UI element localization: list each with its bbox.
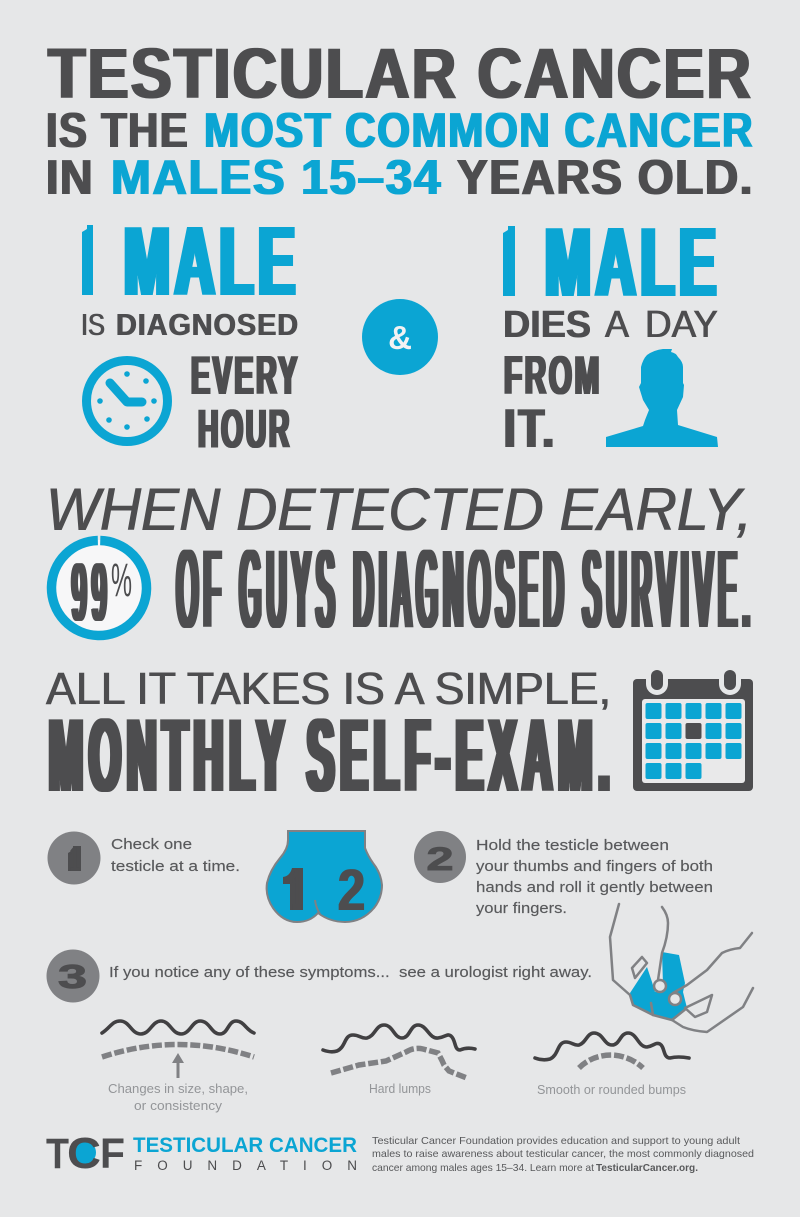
- symptom: smooth bumps: Smooth or rounded bumps: [537, 1083, 686, 1097]
- symptom: changes in size: or consistency: [134, 1099, 223, 1113]
- symptom: changes in size: Changes in size, shape,: [108, 1082, 248, 1096]
- text: hold the testicle: hands and roll it gently between: [476, 879, 713, 896]
- logo: TCF: C: [67, 1129, 101, 1178]
- logo text: foundation name: TESTICULAR CANCER: [133, 1134, 357, 1157]
- text: foundation description: TesticularCancer.org.: [596, 1162, 698, 1174]
- icon: hands examining: [610, 904, 753, 1032]
- logo: TCF: F: [100, 1130, 125, 1178]
- heading: 1 male: MALE: [124, 206, 300, 316]
- logo text: foundation name: [133, 1134, 357, 1173]
- text: foundation description: Testicular Cancer Foundation provides education and support to young adult: [372, 1135, 740, 1147]
- title: IN: [46, 151, 94, 205]
- text: every hour: EVERY: [191, 344, 300, 406]
- symptom: hard lumps: Hard lumps: [369, 1082, 431, 1096]
- icon: scrotum diagram: 2: [338, 858, 365, 923]
- heading: 1 male: [503, 207, 721, 317]
- panel: dies a day: [503, 207, 721, 459]
- text: hold the testicle: your thumbs and fingers of both: [476, 858, 713, 875]
- symptom: smooth bumps: [535, 1033, 689, 1097]
- text: foundation description: cancer among males ages 15–34. Learn more at: [372, 1162, 594, 1174]
- text: hold the testicle: Hold the testicle between: [476, 837, 669, 854]
- text: hold the testicle: [476, 837, 713, 917]
- panel: diagnosed every hour: [81, 206, 300, 460]
- text: dies a day: A: [605, 304, 630, 346]
- text: dies a day: DIES: [503, 304, 591, 346]
- icon: number 2 badge: 2: [426, 841, 454, 877]
- icon: ampersand circle: &: [388, 319, 412, 356]
- text: check one testicle: [111, 836, 240, 875]
- text: symptoms instruction: If you notice any of these symptoms... see a urologist right away.: [109, 964, 592, 981]
- text: hold the testicle: your fingers.: [476, 900, 567, 917]
- chart: 99 percent ring: [50, 539, 148, 638]
- chart: 99 percent ring: 99: [72, 547, 112, 638]
- text: from it: FROM: [504, 344, 602, 406]
- icon: person silhouette: [606, 349, 718, 447]
- text: is diagnosed: IS: [81, 307, 105, 342]
- text: all it takes is a simple: ALL IT TAKES IS A SIMPLE,: [46, 663, 611, 714]
- icon: clock: [86, 360, 168, 442]
- logo: TCF: [46, 1129, 125, 1178]
- logo text: foundation name: FOUNDATION: [134, 1158, 357, 1173]
- arrow: [172, 1053, 184, 1078]
- icon: number 2 badge: [414, 831, 466, 883]
- symptom: hard lumps: [323, 1025, 475, 1096]
- text: every hour: [191, 344, 300, 460]
- heading: 1 male: 1: [504, 207, 514, 317]
- title: [46, 35, 754, 205]
- icon: scrotum diagram: [267, 831, 382, 923]
- step 3: [46, 950, 592, 1002]
- text: check one testicle: Check one: [111, 836, 192, 853]
- heading: when detected early: WHEN DETECTED EARLY,: [46, 476, 752, 543]
- title: MALES 15–34: [111, 151, 442, 205]
- symptom: changes in size: [102, 1021, 254, 1113]
- text: is diagnosed: DIAGNOSED: [116, 307, 299, 342]
- chart: 99 percent ring: %: [111, 553, 132, 606]
- footer: [46, 1129, 754, 1178]
- text: from it: [504, 344, 602, 459]
- icon: number 3 badge: 3: [58, 958, 87, 995]
- text: from it: IT.: [504, 397, 557, 459]
- title: YEARS OLD.: [457, 151, 754, 205]
- icon: scrotum diagram: 1: [291, 858, 302, 923]
- text: foundation description: [372, 1135, 754, 1174]
- heading: 1 male: [82, 206, 300, 316]
- logo: TCF: T: [46, 1130, 69, 1178]
- panel: when detected early: [46, 476, 756, 651]
- step 1: [48, 832, 240, 884]
- title: IS THE: [46, 104, 189, 158]
- text: foundation description: males to raise awareness about testicular cancer, the most commonly diagnosed: [372, 1148, 754, 1160]
- icon: number 1 badge: [48, 832, 100, 884]
- step 2: [414, 831, 713, 917]
- icon: ampersand circle: [362, 299, 438, 375]
- text: check one testicle: testicle at a time.: [111, 858, 240, 875]
- text: dies a day: [503, 304, 718, 346]
- icon: number 3 badge: [46, 950, 100, 1002]
- heading: 1 male: 1: [83, 206, 93, 316]
- icon: calendar: [633, 666, 753, 791]
- text: every hour: HOUR: [198, 398, 292, 460]
- icon: number 1 badge: 1: [69, 840, 80, 879]
- text: dies a day: DAY: [645, 304, 718, 346]
- panel: monthly self-exam: [46, 663, 753, 814]
